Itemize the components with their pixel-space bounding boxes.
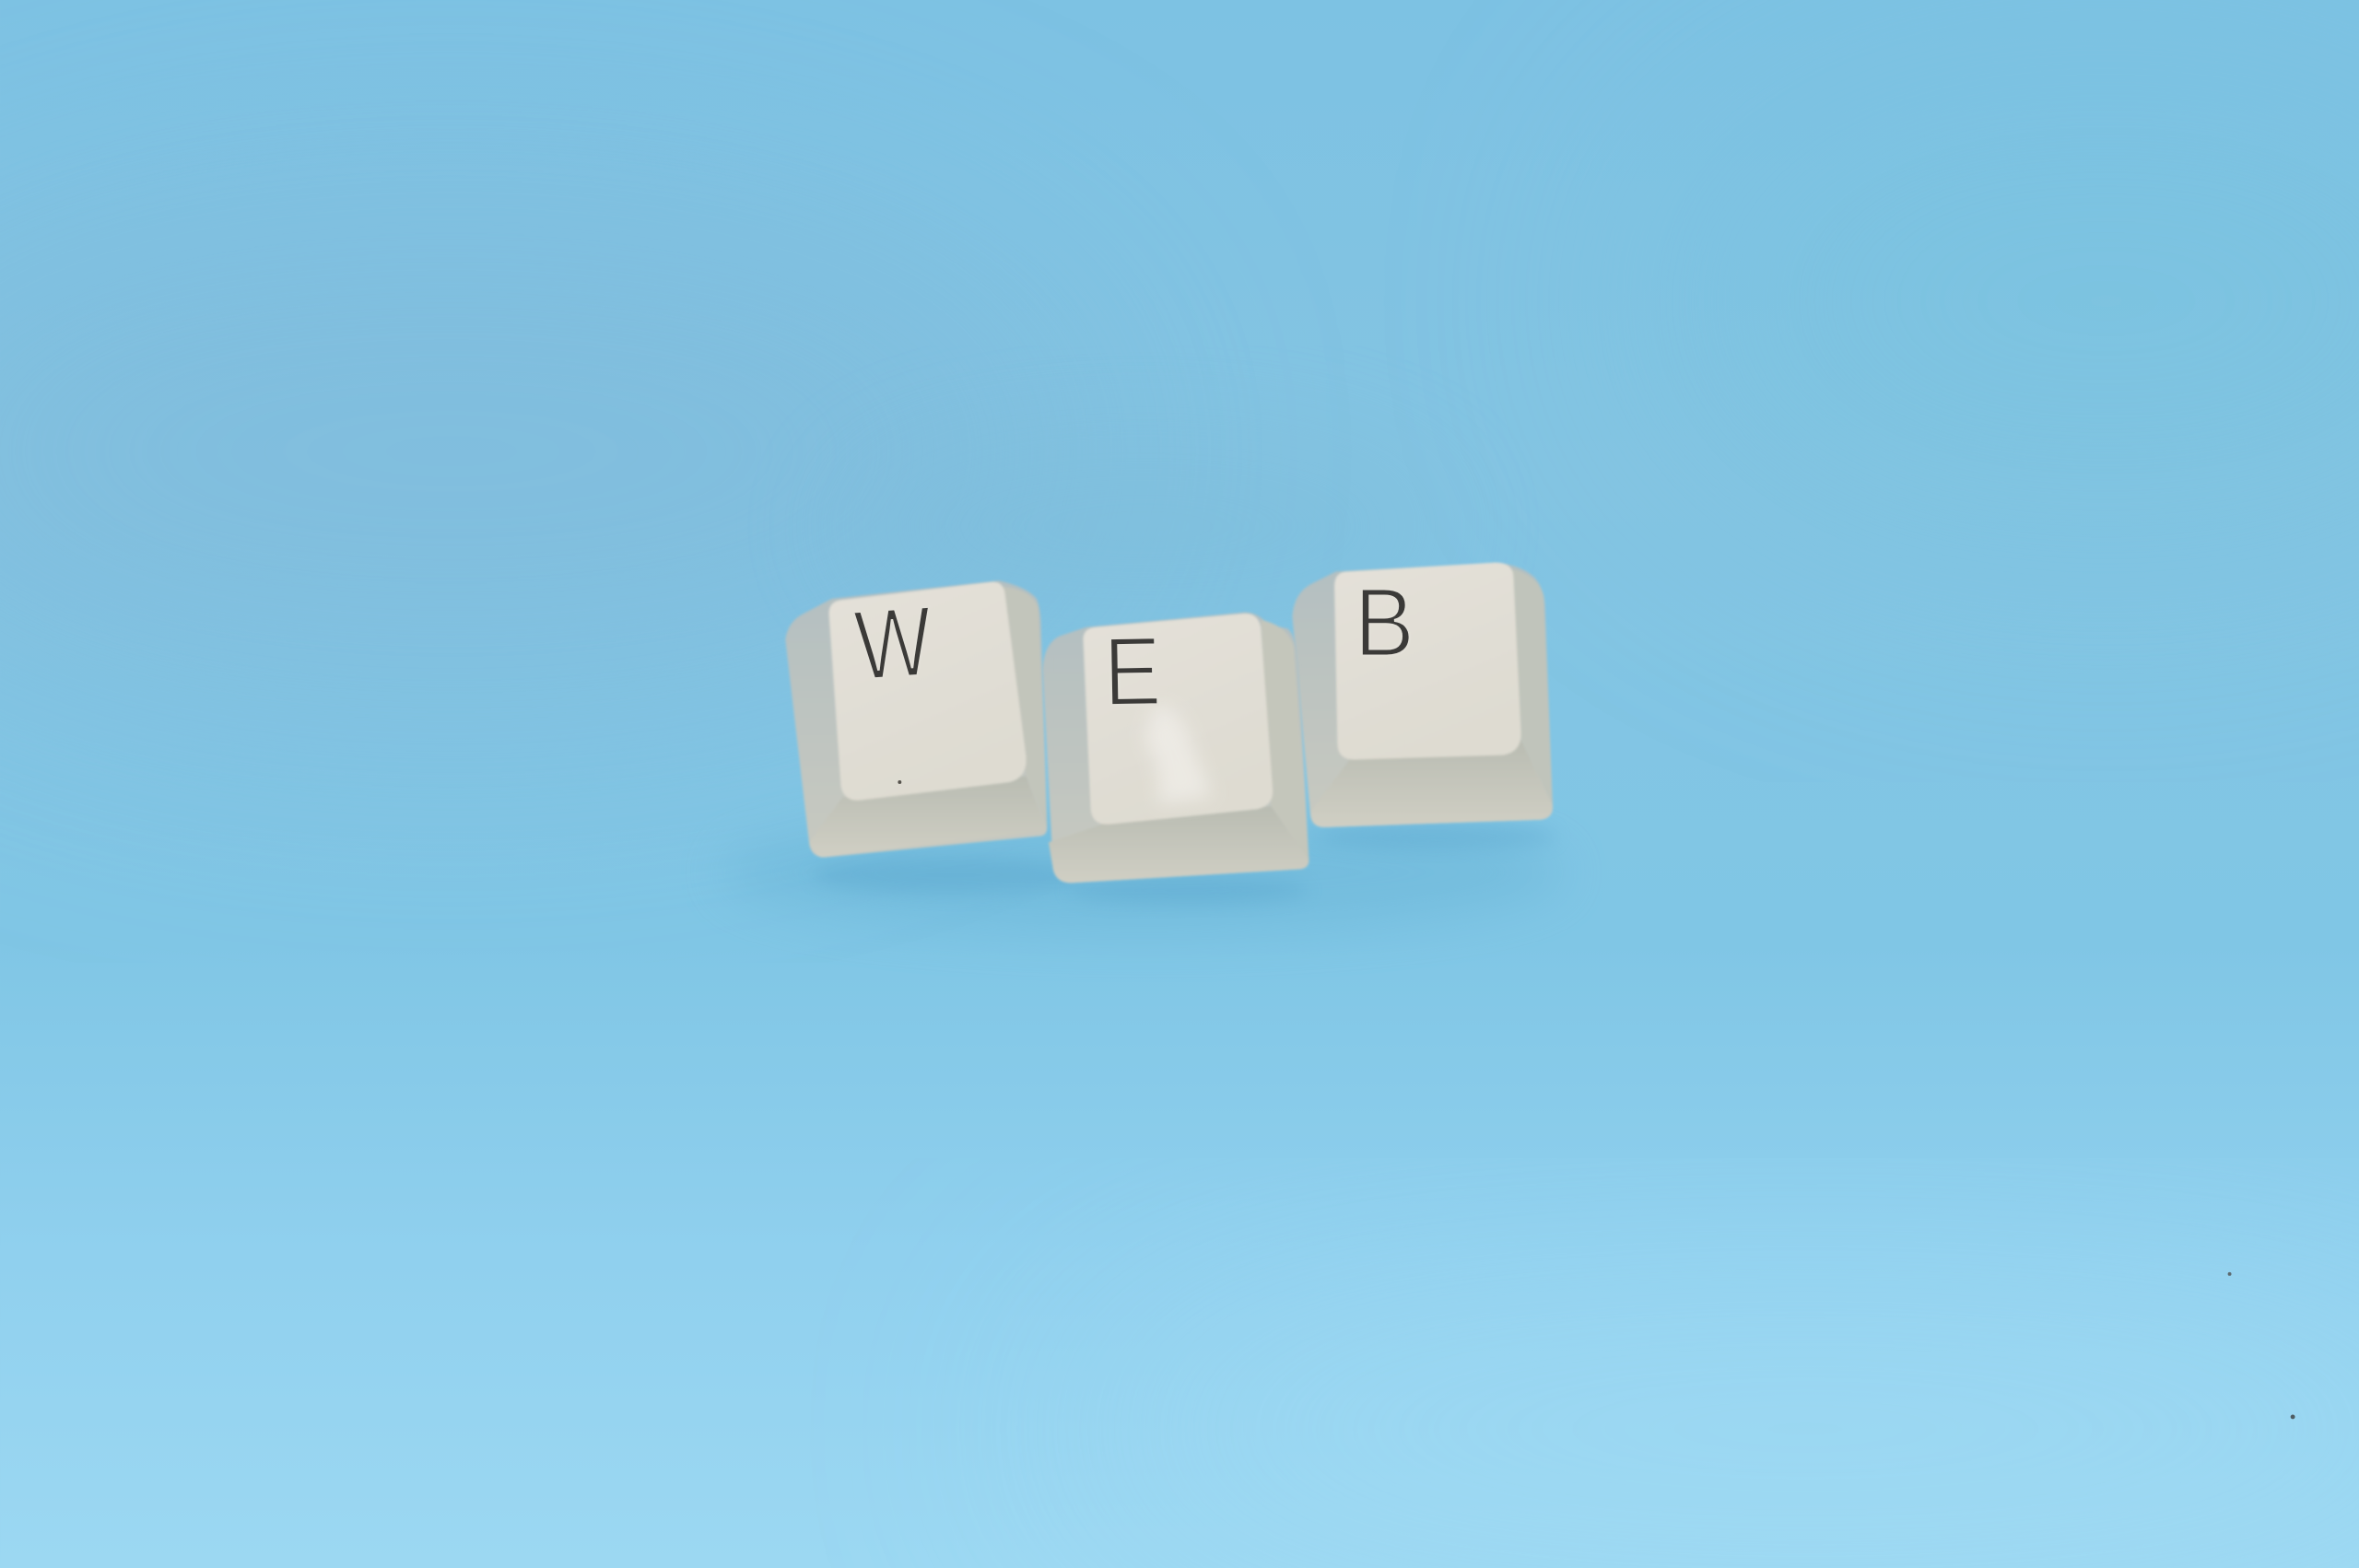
keycap: E [1042, 612, 1309, 883]
speck on W key [898, 780, 901, 784]
letter B: B [1354, 568, 1414, 677]
small specks on backdrop [2228, 1272, 2295, 1419]
keycap: W [785, 580, 1047, 858]
keycap: B [1292, 563, 1553, 827]
letter W: W [851, 585, 935, 701]
highlight streak on E key [1144, 704, 1213, 804]
letter E: E [1103, 617, 1162, 727]
soft shadow under keycaps [722, 813, 1565, 932]
